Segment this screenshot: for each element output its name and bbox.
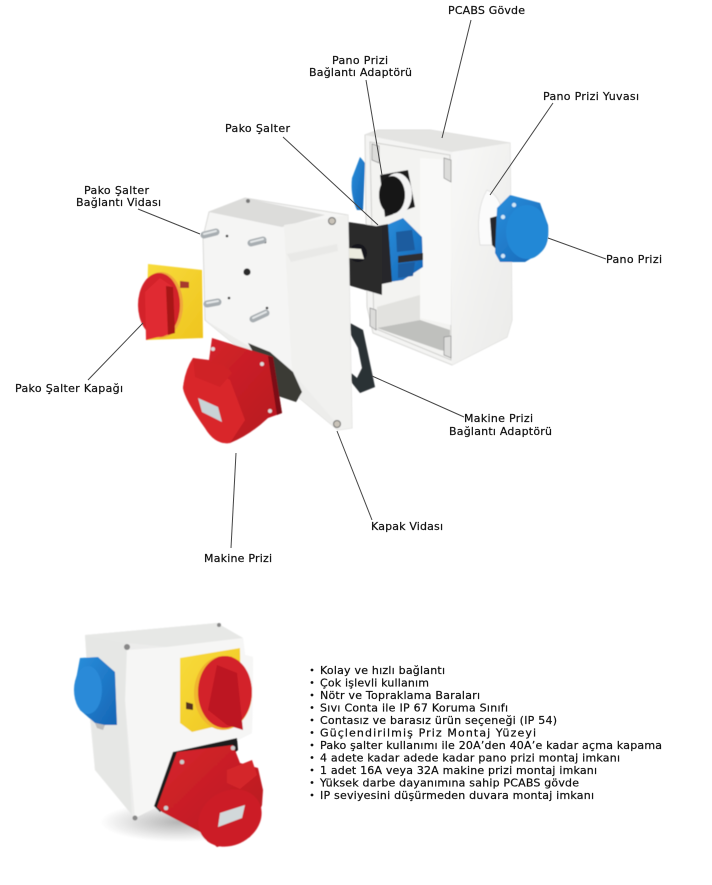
label: panel socket adapter: Bağlantı Adaptörü	[309, 66, 412, 79]
ground shadow	[100, 802, 256, 842]
feature list: Çok işlevli kullanım	[320, 676, 429, 690]
feature list: Pako şalter kullanımı ile 20A’den 40A’e kadar açma kapama	[320, 739, 662, 752]
label: pako switch: Pako Şalter	[225, 122, 290, 135]
machine socket connection adapter	[350, 323, 375, 393]
makine prizi red plug	[183, 338, 282, 443]
label: machine socket adapter	[449, 412, 552, 438]
feature list: Yüksek darbe dayanımına sahip PCABS gövde	[319, 776, 579, 790]
front cover	[203, 198, 352, 430]
label: PCABS body: PCABS Gövde	[448, 4, 525, 17]
hole in front cover behind machine socket	[248, 343, 302, 402]
label: pako switch screw: Pako Şalter	[84, 184, 149, 197]
feature list	[311, 664, 662, 802]
left blue socket behind box	[352, 157, 365, 210]
pano prizi blue socket	[490, 195, 548, 262]
label: pako switch screw	[76, 184, 161, 209]
leader lines	[88, 20, 606, 548]
label: machine socket adapter: Makine Prizi	[464, 412, 533, 425]
label: pako switch cover: Pako Şalter Kapağı	[15, 382, 123, 395]
feature list: Sıvı Conta ile IP 67 Koruma Sınıfı	[320, 702, 508, 714]
label: cover screw: Kapak Vidası	[371, 520, 443, 533]
red machine plug	[154, 738, 272, 858]
feature list: Kolay ve hızlı bağlantı	[320, 664, 445, 677]
blue socket	[74, 657, 117, 730]
feature list: Nötr ve Topraklama Baraları	[320, 689, 480, 702]
label: panel socket adapter: Pano Prizi	[332, 54, 388, 67]
pako switch	[347, 218, 423, 295]
label: machine socket adapter: Bağlantı Adaptörü	[449, 425, 552, 438]
label: panel socket adapter	[309, 54, 412, 79]
label: machine socket: Makine Prizi	[204, 552, 272, 565]
label: pako switch screw: Bağlantı Vidası	[76, 196, 161, 209]
PCABS body, rear box	[365, 130, 512, 365]
feature list: Güçlendirilmiş Priz Montaj Yüzeyi	[320, 726, 536, 740]
pano prizi connection adapter	[379, 170, 415, 217]
enclosure	[85, 623, 253, 820]
assembled product photo	[74, 623, 272, 858]
yellow plate and red knob	[180, 648, 252, 732]
label: panel socket: Pano Prizi	[606, 253, 662, 266]
feature list: 4 adete kadar adede kadar pano prizi montaj imkanı	[320, 752, 620, 764]
feature list: 1 adet 16A veya 32A makine prizi montaj imkanı	[320, 764, 597, 777]
screws	[204, 199, 340, 428]
yellow and red pako cover	[138, 264, 203, 340]
feature list: IP seviyesini düşürmeden duvara montaj imkanı	[320, 789, 594, 802]
exploded product view	[138, 130, 548, 443]
label: panel socket seat: Pano Prizi Yuvası	[543, 90, 639, 103]
feature list: Contasız ve barasız ürün seçeneği (IP 54)	[320, 714, 557, 727]
